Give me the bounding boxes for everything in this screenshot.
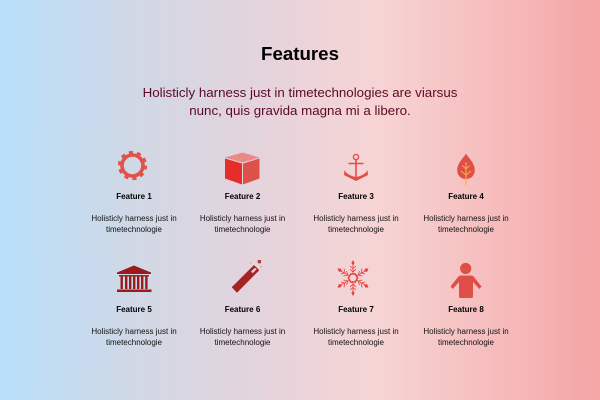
icon: person [450, 262, 482, 298]
icon: cube [225, 152, 260, 184]
feature 1 text: Feature 1 [116, 192, 152, 201]
feature 4 text: Holisticly harness just in [423, 214, 509, 223]
subtitle text: Holisticly harness just in timetechnologies are viarsus [143, 85, 457, 100]
feature 1 text [91, 192, 177, 234]
title: Features [261, 43, 339, 64]
feature 7 text: Holisticly harness just in [313, 327, 399, 336]
icon: leaf [457, 154, 475, 185]
feature 2 text: Holisticly harness just in [200, 214, 285, 223]
feature 3 text [313, 192, 399, 234]
feature 4 text [423, 192, 509, 234]
icon: snowflake [338, 260, 368, 296]
icon: magic wand [232, 260, 262, 293]
feature 2 text: timetechnologie [214, 225, 271, 234]
feature 2 text: Feature 2 [225, 192, 260, 201]
feature 7 text: timetechnologie [328, 338, 384, 347]
feature 3 text: Feature 3 [338, 192, 374, 201]
feature 2 text [200, 192, 285, 234]
feature 3 text: timetechnologie [328, 225, 384, 234]
icon: gear [118, 150, 148, 180]
subtitle text: nunc, quis gravida magna mi a libero. [189, 103, 411, 118]
feature 8 text [423, 305, 509, 347]
feature 4 text: Feature 4 [448, 192, 484, 201]
icon: temple [117, 266, 152, 292]
feature 5 text: timetechnologie [106, 338, 162, 347]
feature 8 text: Holisticly harness just in [423, 327, 509, 336]
feature 5 text: Feature 5 [116, 305, 152, 314]
feature 5 text [91, 305, 177, 347]
icon: anchor [344, 154, 368, 181]
feature 6 text: Holisticly harness just in [200, 327, 285, 336]
feature 4 text: timetechnologie [438, 225, 494, 234]
feature 6 text [200, 305, 285, 347]
subtitle text [143, 85, 457, 118]
feature 3 text: Holisticly harness just in [313, 214, 399, 223]
feature 7 text [313, 305, 399, 347]
feature 1 text: timetechnologie [106, 225, 162, 234]
feature 5 text: Holisticly harness just in [91, 327, 177, 336]
feature 7 text: Feature 7 [338, 305, 374, 314]
feature 1 text: Holisticly harness just in [91, 214, 177, 223]
feature 6 text: Feature 6 [225, 305, 260, 314]
feature 6 text: timetechnologie [214, 338, 271, 347]
feature 8 text: Feature 8 [448, 305, 484, 314]
feature 8 text: timetechnologie [438, 338, 494, 347]
